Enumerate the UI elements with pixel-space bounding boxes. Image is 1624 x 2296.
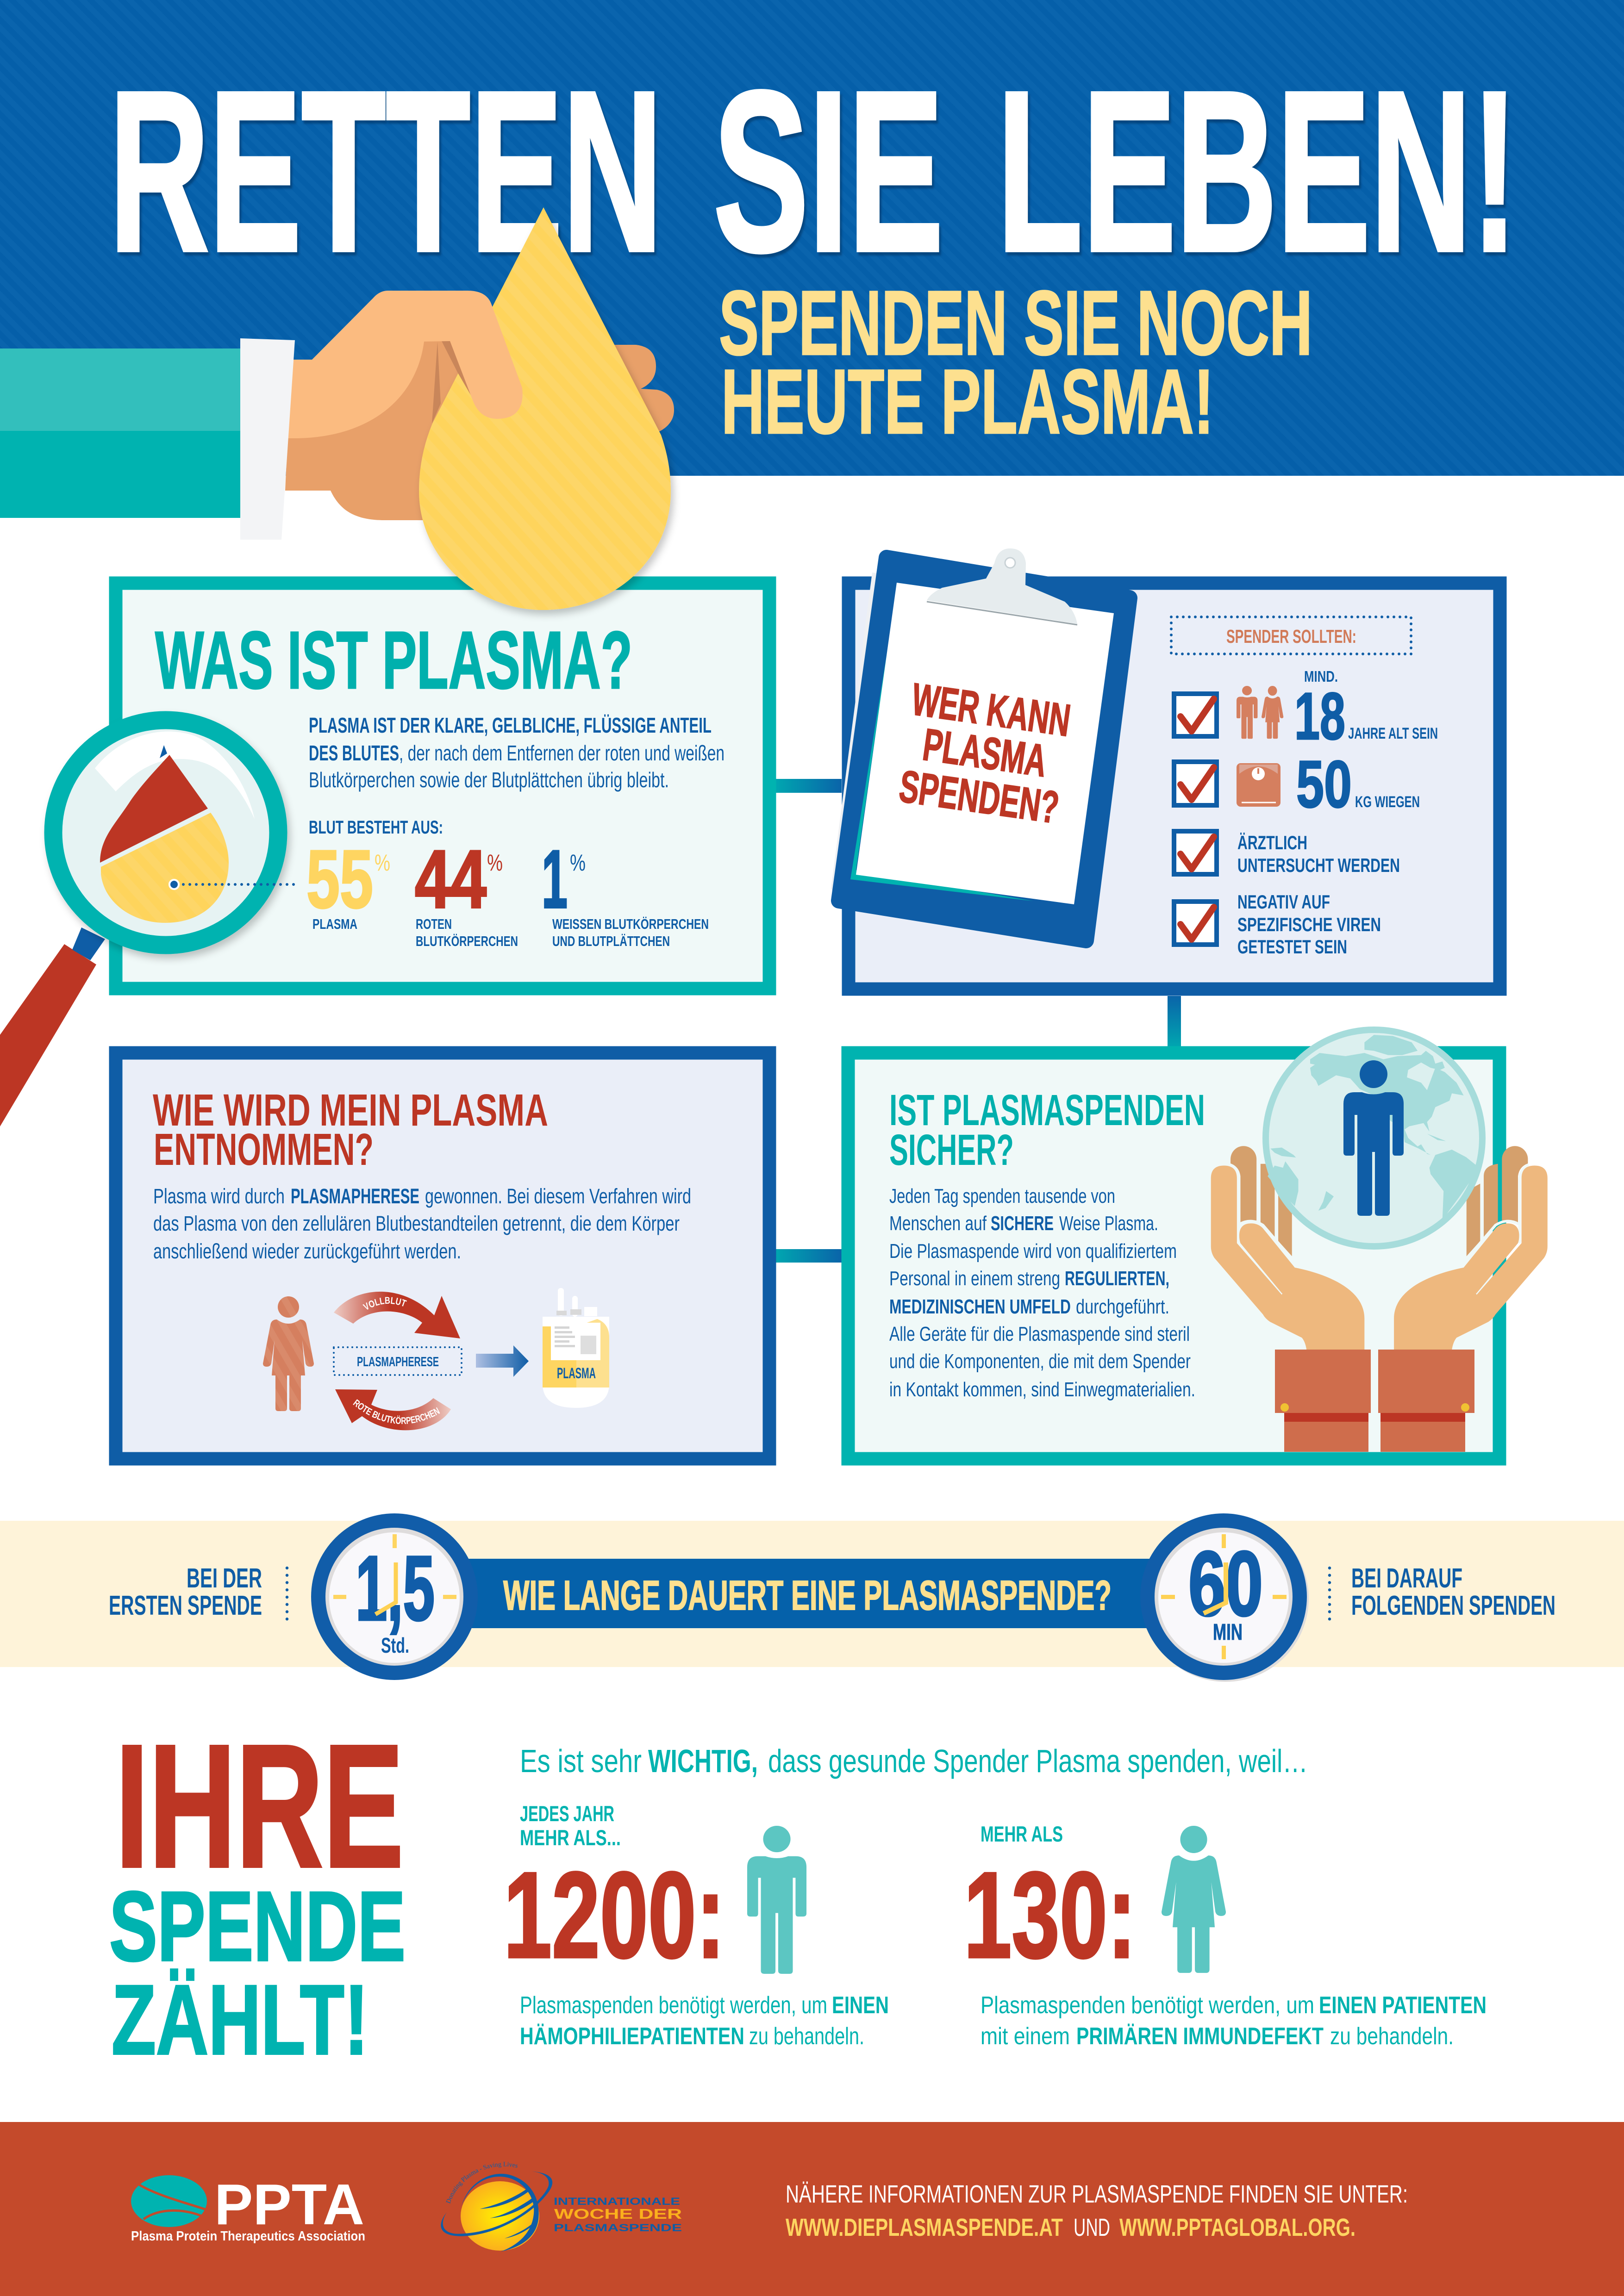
requirement: 50 kg: KG WIEGEN [1355,793,1420,811]
label: blut besteht aus: BLUT BESTEHT AUS: [309,817,443,838]
text: first donation: ERSTEN SPENDE [109,1590,262,1621]
heading: ist plasmaspenden sicher [889,1086,1205,1175]
dotted divider right [1328,1568,1331,1626]
text block: plasmapherese explanation: PLASMAPHERESE [291,1184,419,1208]
requirement: medical exam: ÄRZTLICH [1237,832,1307,853]
text block: haemophilia: HÄMOPHILIEPATIENTEN [520,2023,744,2050]
text block: definition: , der nach dem Entfernen der roten und weißen [399,741,725,765]
heading: ist plasmaspenden sicher: IST PLASMASPENDEN [889,1086,1205,1135]
text: following donations [1351,1563,1555,1621]
text block: plasmapherese explanation [153,1184,691,1263]
text block: immune deficiency [981,1992,1487,2050]
text: further information: UND [1074,2214,1110,2241]
text block: safety explanation: Menschen auf [889,1212,987,1235]
icon: sleeves [1275,1350,1474,1452]
text: further information: WWW.PPTAGLOBAL.ORG. [1119,2214,1355,2241]
icon: magnifying glass with blood drop [0,720,297,1126]
icon: male patient [747,1826,806,1974]
icon: clock 60 minutes: 60 [1188,1532,1263,1635]
text block: safety explanation: Weise Plasma. [1059,1212,1158,1235]
text: intro sentence: WICHTIG, [648,1743,758,1779]
text block: immune deficiency: zu behandeln. [1330,2023,1454,2050]
heading: ist plasmaspenden sicher: SICHER? [889,1126,1014,1175]
icon: right hand [1394,1164,1548,1350]
requirement: 18 years: 18 [1294,679,1345,753]
requirement: virus negative: NEGATIV AUF [1237,891,1330,913]
requirement: virus negative: GETESTET SEIN [1237,936,1347,958]
requirement: 18 years [1174,668,1438,753]
heading: wer kann plasma spenden [896,673,1074,833]
text: further information [786,2180,1408,2241]
icon: plasma bag: PLASMA [557,1365,596,1381]
text block: immune deficiency: EINEN PATIENTEN [1319,1992,1487,2019]
stat: 130 donations [964,1822,1487,2050]
stat: 55 percent plasma: % [375,850,390,876]
stat: 1 percent white blood cells and platelets: 1 [542,833,568,925]
stat: 44 percent red blood cells: ROTEN [416,916,452,932]
text block: safety explanation: Alle Geräte für die Plasmaspende sind steril [889,1323,1190,1345]
arrow: rote blutkoerperchen [335,1389,451,1430]
header band [0,0,1624,476]
heading: wer kann plasma spenden: SPENDEN? [896,760,1062,833]
text: intro sentence: dass gesunde Spender Plasma spenden, weil… [768,1743,1308,1779]
illustration: hand holding plasma drop [0,207,674,610]
connector: panel 2 to panel 4 [1168,996,1181,1047]
text block: haemophilia [520,1992,889,2050]
heading: ihre spende zaehlt: SPENDE [109,1871,406,1982]
text block: definition: Blutkörperchen sowie der Blutplättchen übrig bleibt. [309,768,669,792]
logo: ppta [131,2173,365,2244]
stat: 1 percent white blood cells and platelets [542,833,709,949]
text block: safety explanation [889,1185,1195,1401]
stat: 55 percent plasma: PLASMA [312,916,357,932]
text block: definition: PLASMA IST DER KLARE, GELBLICHE, FLÜSSIGE ANTEIL [309,713,712,737]
dotted divider left [286,1568,288,1626]
logo: internationale woche der plasmaspende: INTERNATIONALE [554,2196,680,2207]
icon: clipboard [831,548,1130,940]
text block: safety explanation: MEDIZINISCHEN UMFELD [889,1295,1071,1318]
stat: 1200 donations: MEHR ALS... [520,1825,621,1850]
icon: clock 1,5 hours [311,1513,478,1680]
text block: safety explanation: Personal in einem streng [889,1267,1060,1290]
panel: was ist plasma [116,583,769,989]
logo: internationale woche der plasmaspende [441,2161,682,2252]
text block: haemophilia: zu behandeln. [749,2023,864,2050]
requirement: 50 kg [1174,747,1420,821]
heading: wie lange dauert eine plasmaspende: WIE LANGE DAUERT EINE PLASMASPENDE? [503,1573,1112,1619]
icon: clock 1,5 hours: 1,5 [356,1537,435,1639]
stat: 1 percent white blood cells and platelets: % [570,850,586,876]
text block: haemophilia: Plasmaspenden benötigt werden, um [520,1992,827,2019]
text block: definition [309,713,725,792]
logo: internationale woche der plasmaspende: PLASMASPENDE [554,2222,682,2234]
text block: safety explanation: durchgeführt. [1076,1295,1169,1318]
icon: plasma bag [543,1288,609,1408]
panel: wie wird mein plasma entnommen [116,1053,769,1459]
text block: safety explanation: Jeden Tag spenden tausende von [889,1185,1115,1207]
panel: ist plasmaspenden sicher [848,1027,1548,1459]
arrow: vollblut [334,1292,460,1338]
title: SIE [713,44,943,299]
icon: clock 60 minutes: MIN [1213,1620,1243,1645]
panel: wer kann plasma spenden [831,548,1500,989]
logo: internationale woche der plasmaspende: Donating Plasma - Saving Lives [445,2161,518,2204]
stat: 1200 donations [504,1801,889,2050]
arrow: rote blutkoerperchen: ROTE BLUTKÖRPERCHEN [351,1398,442,1426]
band: donation duration [0,1513,1624,1682]
title: RETTEN [109,44,662,299]
stat: 1 percent white blood cells and platelets: WEISSEN BLUTKÖRPERCHEN [552,916,709,932]
logo: ppta: PPTA [214,2173,364,2237]
text: first donation: BEI DER [187,1563,262,1593]
heading: was ist plasma: WAS IST PLASMA? [155,615,632,706]
requirement: medical exam: UNTERSUCHT WERDEN [1237,854,1400,876]
title [109,44,1518,299]
stat: 130 donations: 130: [964,1847,1136,1983]
arrow: vollblut: VOLLBLUT [362,1295,407,1313]
label: plasmapherese: PLASMAPHERESE [357,1355,439,1369]
connector: panel 3 to panel 4 [776,1249,842,1263]
icon: left hand [1211,1164,1364,1350]
text block: safety explanation: REGULIERTEN, [1065,1267,1169,1290]
stat: 1 percent white blood cells and platelets: UND BLUTPLÄTTCHEN [552,933,670,949]
label: spender sollten: SPENDER SOLLTEN: [1226,626,1356,647]
connector: panel 1 to panel 2 [776,779,842,793]
text block: haemophilia: EINEN [832,1992,889,2019]
icon: clock 1,5 hours: Std. [381,1633,409,1657]
requirement: 18 years: MIND. [1304,668,1338,685]
text: intro sentence: Es ist sehr [520,1743,642,1779]
heading: wie wird mein plasma entnommen: ENTNOMMEN? [154,1124,374,1175]
stat: 55 percent plasma: 55 [306,833,373,925]
text block: immune deficiency: mit einem [981,2023,1070,2050]
text block: safety explanation: Die Plasmaspende wird von qualifiziertem [889,1240,1177,1263]
logo: ppta: Plasma Protein Therapeutics Association [131,2229,365,2244]
text block: plasmapherese explanation: gewonnen. Bei diesem Verfahren wird [425,1184,691,1208]
icon: globe with person [1263,1027,1485,1249]
footer [0,2122,1624,2296]
requirement: 50 kg: 50 [1296,747,1352,821]
requirement: virus negative [1174,891,1381,958]
heading: ihre spende zaehlt [109,1709,406,2075]
text block: plasmapherese explanation: anschließend wieder zurückgeführt werden. [153,1239,461,1263]
stat: 1200 donations: JEDES JAHR [520,1801,614,1826]
icon: donor woman [263,1296,314,1411]
text block: immune deficiency: Plasmaspenden benötigt werden, um [981,1992,1314,2019]
heading: ihre spende zaehlt: ZÄHLT! [112,1965,369,2075]
heading: wer kann plasma spenden: PLASMA [920,719,1050,786]
text block: immune deficiency: PRIMÄREN IMMUNDEFEKT [1076,2023,1324,2050]
text block: safety explanation: SICHERE [991,1212,1054,1235]
requirement: medical exam [1174,831,1400,876]
heading: ihre spende zaehlt: IHRE [115,1709,404,1904]
text block: plasmapherese explanation: das Plasma von den zellulären Blutbestandteilen getrennt, die dem Körper [153,1212,680,1235]
heading: wie wird mein plasma entnommen [153,1085,548,1175]
text: further information: NÄHERE INFORMATIONEN ZUR PLASMASPENDE FINDEN SIE UNTER: [786,2180,1408,2208]
subtitle [719,272,1312,453]
text: following donations: BEI DARAUF [1351,1563,1462,1593]
subtitle: HEUTE PLASMA! [721,350,1214,453]
stat: 44 percent red blood cells: BLUTKÖRPERCHEN [416,933,518,949]
subtitle: SPENDEN SIE NOCH [719,272,1312,374]
stat: 44 percent red blood cells: 44 [415,833,487,925]
text: first donation [109,1563,262,1621]
stat: 130 donations: MEHR ALS [981,1822,1063,1846]
logo: internationale woche der plasmaspende: WOCHE DER [554,2206,682,2222]
label: spender sollten [1171,617,1411,654]
text block: definition: DES BLUTES [309,741,399,765]
text block: safety explanation: in Kontakt kommen, sind Einwegmaterialien. [889,1378,1195,1401]
heading: wie wird mein plasma entnommen: WIE WIRD MEIN PLASMA [153,1085,548,1135]
arrow: to plasma bag [476,1345,529,1377]
text block: plasmapherese explanation: Plasma wird durch [153,1184,285,1208]
icon: female patient [1162,1826,1226,1973]
icon: clock 60 minutes [1140,1513,1309,1682]
requirement: virus negative: SPEZIFISCHE VIREN [1237,914,1381,935]
stat: 1200 donations: 1200: [504,1847,725,1983]
text: intro sentence [520,1743,1308,1779]
text block: safety explanation: und die Komponenten, die mit dem Spender [889,1350,1191,1373]
label: plasmapherese [334,1347,462,1375]
stat: 44 percent red blood cells: % [487,850,503,876]
text: further information: WWW.DIEPLASMASPENDE.AT [786,2214,1063,2241]
icon: back fingers [1230,1146,1528,1258]
requirement: 18 years: JAHRE ALT SEIN [1348,725,1438,742]
heading: wer kann plasma spenden: WER KANN [909,673,1074,746]
